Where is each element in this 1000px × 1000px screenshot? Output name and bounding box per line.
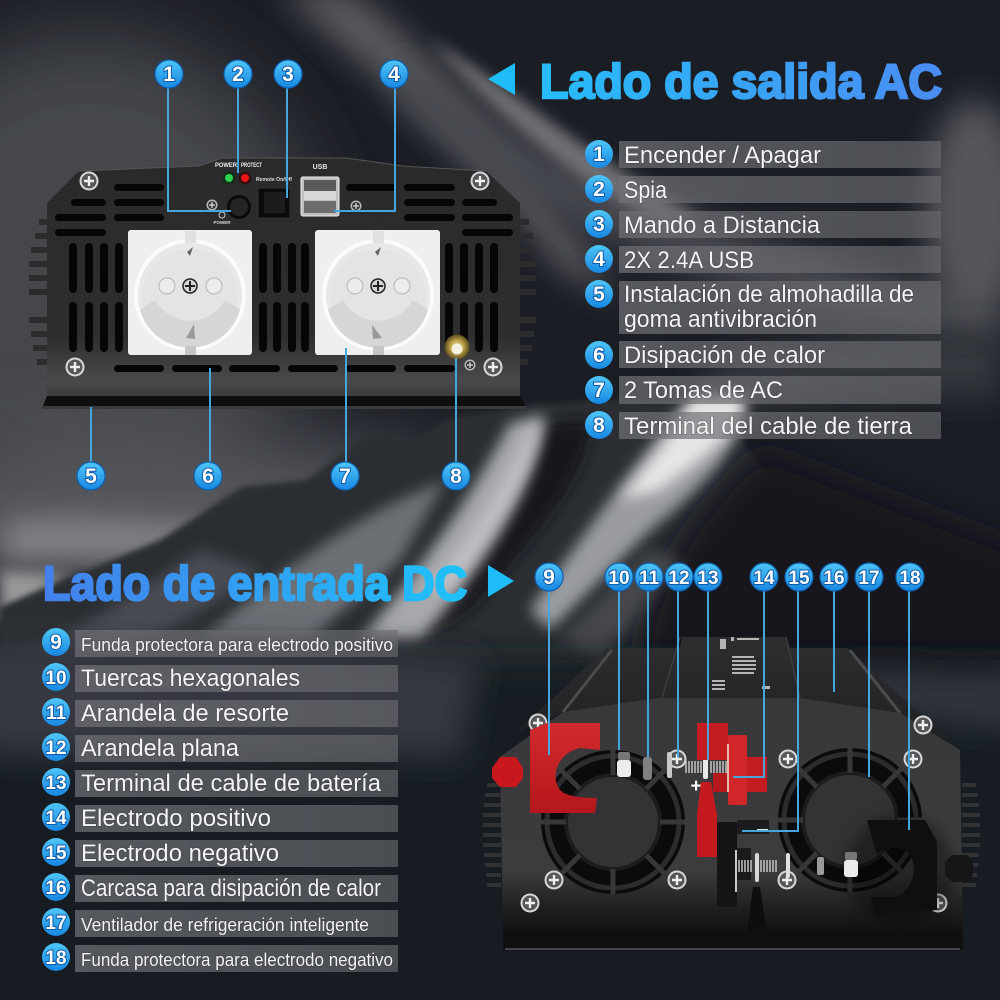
badges: DC side device: 15 <box>788 568 810 589</box>
badges: DC side device: 16 <box>823 568 845 589</box>
indicator lights: Remote On/Off <box>256 177 292 183</box>
badges: DC side device: 14 <box>753 568 775 589</box>
indicator lights: PROTECT <box>241 163 262 169</box>
badges: DC side device: 12 <box>668 568 690 589</box>
background: mountains <box>0 395 1000 720</box>
USB ports: USB <box>313 164 327 171</box>
housing roof <box>515 637 957 747</box>
callout lines: DC side <box>549 590 909 831</box>
USB ports <box>301 164 339 216</box>
heat-sink fins <box>483 785 980 885</box>
positive wire boot <box>697 782 717 857</box>
legend list: DC side <box>42 628 398 972</box>
legend list: DC side: Ventilador de refrigeración inteligente <box>81 915 369 935</box>
AC socket left <box>128 230 252 355</box>
label stickers <box>712 637 770 690</box>
positive hardware: nut, washers, bolt <box>617 752 726 797</box>
legend list: AC side: Instalación de almohadilla de <box>624 281 914 308</box>
cooling fan left <box>541 750 685 894</box>
legend list: DC side: 10 <box>45 668 67 689</box>
legend list: AC side <box>585 140 941 440</box>
base flange <box>503 935 963 950</box>
legend list: DC side: 17 <box>45 913 67 934</box>
ground terminal <box>444 334 470 360</box>
legend list: DC side: Arandela plana <box>81 735 240 762</box>
badges: AC side device: 5 <box>85 465 97 488</box>
badges: AC side device: 7 <box>339 465 351 488</box>
positive hardware: nut, washers, bolt: + <box>690 776 702 797</box>
badges: DC side device: 10 <box>608 568 630 589</box>
callout lines: AC side <box>91 86 456 463</box>
legend list: AC side: 5 <box>593 283 605 306</box>
badges: AC side device: 3 <box>282 63 294 86</box>
icon: arrow right <box>488 565 514 597</box>
icon: arrow left <box>488 63 515 95</box>
cooling fan right <box>778 748 922 892</box>
badges: DC side device: 18 <box>899 568 921 589</box>
negative battery terminal <box>717 820 790 907</box>
legend list: AC side: 2X 2.4A USB <box>624 247 754 274</box>
badges: AC side device: 1 <box>163 63 175 86</box>
indicator lights: POWER <box>215 163 238 169</box>
badges: DC side device <box>535 563 924 591</box>
screws <box>66 172 502 376</box>
legend list: DC side: Arandela de resorte <box>81 700 289 727</box>
positive battery terminal <box>697 723 767 805</box>
housing front face <box>500 698 963 937</box>
legend list: DC side: Terminal de cable de batería <box>81 770 382 797</box>
legend list: DC side: 13 <box>45 773 67 794</box>
positive electrode protective cover <box>492 723 600 813</box>
legend list: DC side: Electrodo negativo <box>81 840 279 867</box>
panel: DC input side device <box>483 637 980 950</box>
legend list: DC side: 16 <box>45 878 67 899</box>
legend list: AC side: goma antivibración <box>624 306 817 333</box>
badges: AC side device: 4 <box>388 63 400 86</box>
legend list: AC side: 4 <box>593 248 605 271</box>
background: lower clouds <box>0 640 1000 1000</box>
legend list: AC side: 2 Tomas de AC <box>624 377 783 404</box>
legend list: DC side: 9 <box>50 631 62 654</box>
negative wire boot <box>747 887 767 933</box>
heat-sink fins <box>29 222 536 362</box>
legend list: DC side: 14 <box>45 808 67 829</box>
legend list: DC side: 12 <box>45 738 67 759</box>
legend list: DC side: 11 <box>46 703 66 724</box>
legend list: DC side: Electrodo positivo <box>81 805 271 832</box>
legend list: DC side: Funda protectora para electrodo positivo <box>81 635 393 655</box>
badges: AC side device: 6 <box>202 465 214 488</box>
legend list: AC side: 6 <box>593 344 605 367</box>
badges: DC side device: 17 <box>858 568 880 589</box>
badges: AC side device: 8 <box>450 465 462 488</box>
legend list: AC side: Terminal del cable de tierra <box>624 413 913 440</box>
indicator lights <box>215 163 292 184</box>
remote port <box>258 188 290 218</box>
device body <box>47 158 520 398</box>
legend list: AC side: 2 <box>593 178 605 201</box>
legend list: AC side: 1 <box>593 143 605 166</box>
ventilation slots vertical <box>69 243 498 352</box>
legend list: DC side: 15 <box>45 843 67 864</box>
AC socket right <box>315 230 440 355</box>
panel: AC output side device <box>29 158 536 409</box>
ventilation slots horizontal <box>55 184 513 372</box>
legend list: AC side: 7 <box>593 379 605 402</box>
legend list: AC side: 8 <box>593 414 605 437</box>
badges: DC side device: 9 <box>543 566 555 589</box>
legend list: DC side: Tuercas hexagonales <box>81 665 300 692</box>
heading: DC input side: Lado de entrada DC <box>43 558 467 611</box>
legend list: DC side: Funda protectora para electrodo negativo <box>81 950 393 970</box>
legend list: AC side: 3 <box>593 213 605 236</box>
screws <box>520 714 948 912</box>
legend list: AC side: Encender / Apagar <box>624 142 821 169</box>
negative electrode protective cover <box>817 815 973 925</box>
badges: AC side device: 2 <box>232 63 244 86</box>
legend list: AC side: Spia <box>624 177 668 204</box>
base flange <box>42 396 527 408</box>
legend list: AC side: Disipación de calor <box>624 342 825 369</box>
legend list: AC side: Mando a Distancia <box>624 212 821 239</box>
badges: DC side device: 11 <box>639 568 659 589</box>
badges: DC side device: 13 <box>697 568 719 589</box>
heading: AC output side: Lado de salida AC <box>540 56 942 109</box>
legend list: DC side: Carcasa para disipación de calor <box>81 875 381 902</box>
power button: POWER <box>213 220 231 225</box>
badges: AC side device <box>77 60 470 490</box>
power button <box>213 195 251 225</box>
legend list: DC side: 18 <box>45 948 67 969</box>
